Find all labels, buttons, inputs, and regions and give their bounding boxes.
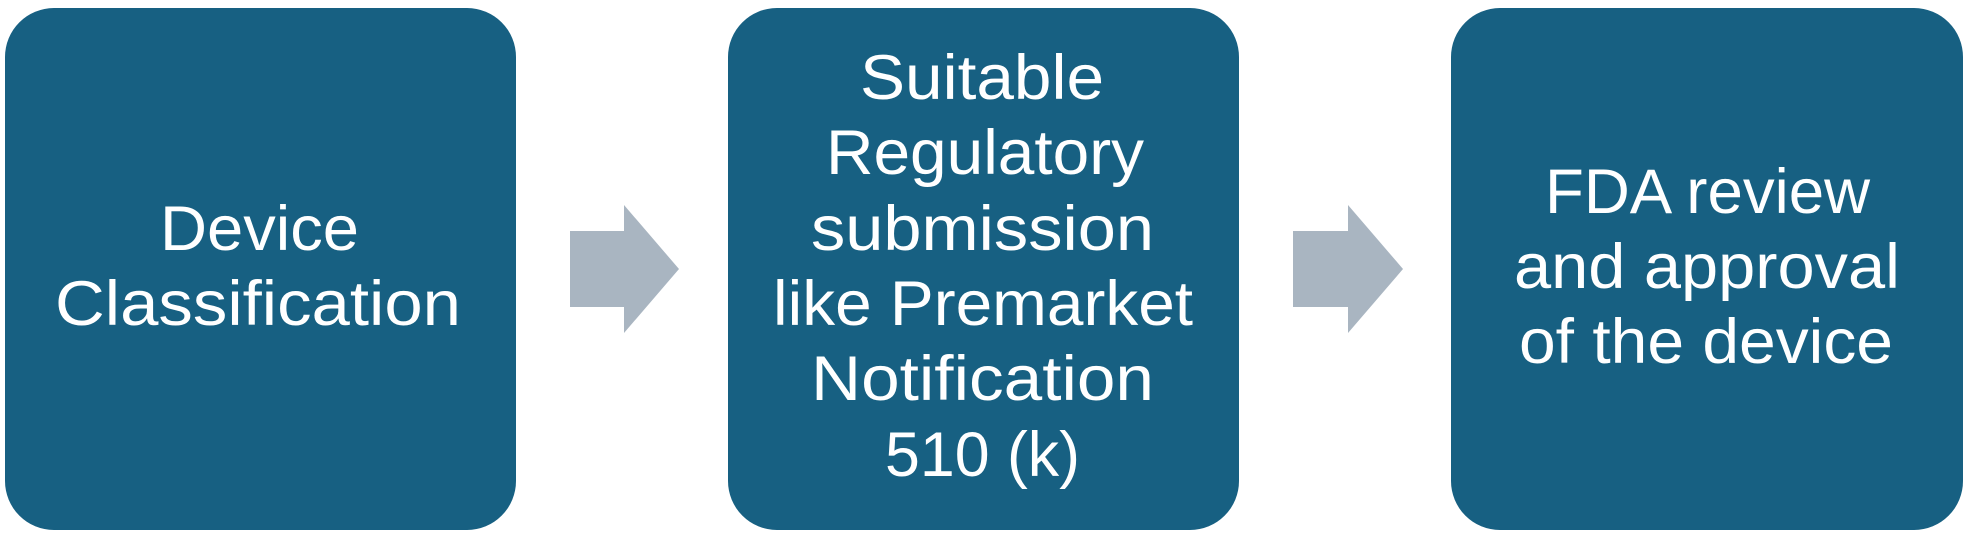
text: FDA review and approval xyxy=(1514,157,1900,377)
text: device classification: Device xyxy=(160,194,359,264)
text: FDA review and approval: and approval xyxy=(1514,232,1900,302)
text: regulatory submission: 510 (k) xyxy=(885,420,1080,490)
text: regulatory submission: submission xyxy=(811,194,1154,264)
text: device classification xyxy=(55,194,461,339)
text: regulatory submission: Notification xyxy=(811,344,1154,414)
panel: regulatory submission xyxy=(728,8,1239,530)
panel: device classification xyxy=(5,8,516,530)
text: FDA review and approval: FDA review xyxy=(1545,157,1871,227)
arrow: step two to step three xyxy=(1293,205,1403,333)
arrow: step one to step two xyxy=(570,205,679,333)
text: regulatory submission: like Premarket xyxy=(773,269,1194,339)
text: regulatory submission: Suitable xyxy=(860,43,1104,113)
text: regulatory submission: Regulatory xyxy=(826,118,1145,188)
text: FDA review and approval: of the device xyxy=(1519,307,1893,377)
text: regulatory submission xyxy=(773,43,1194,490)
panel: FDA review xyxy=(1451,8,1963,530)
text: device classification: Classification xyxy=(55,269,461,339)
